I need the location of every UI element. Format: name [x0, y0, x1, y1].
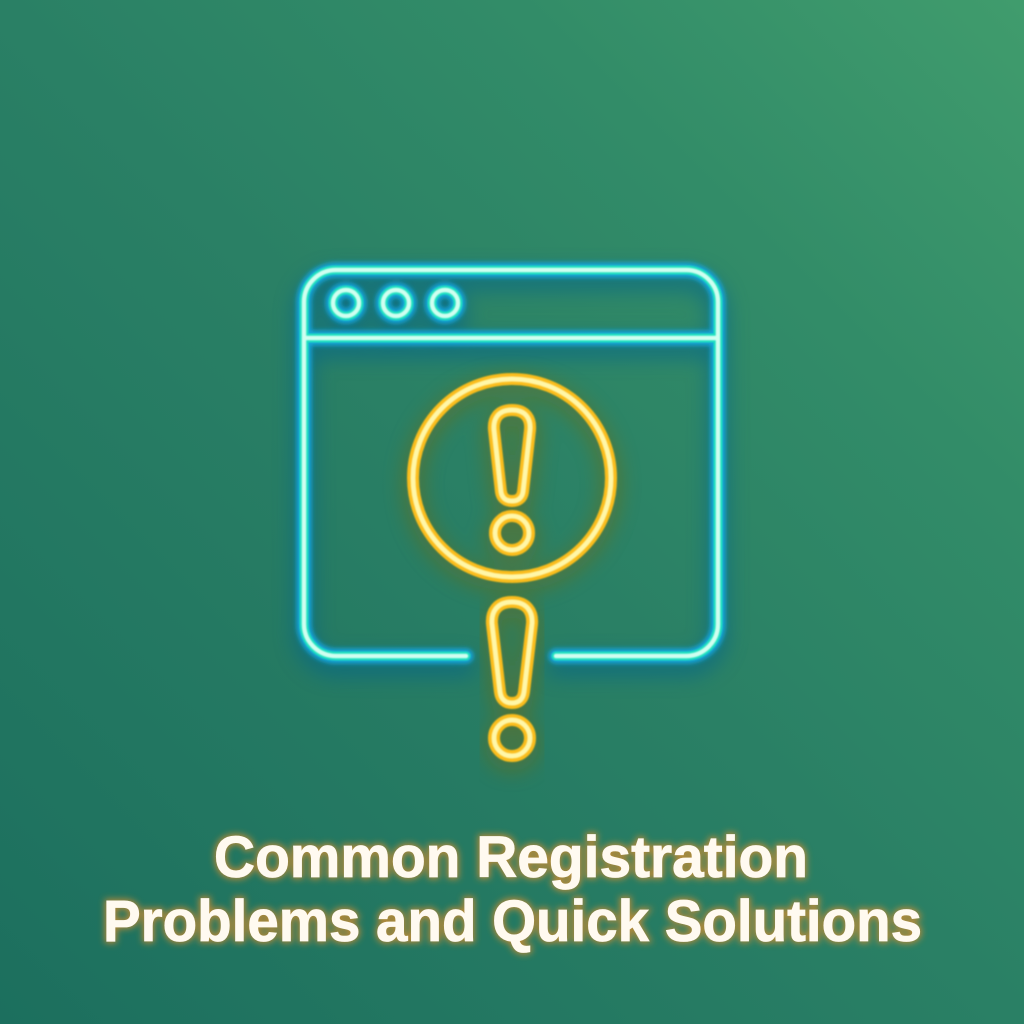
icon: warning circle with exclamation mark — [413, 379, 611, 583]
icon: lower exclamation mark — [492, 602, 532, 762]
title: Common Registration — [214, 825, 808, 890]
title: Problems and Quick Solutions — [103, 889, 922, 954]
icon: browser window — [304, 270, 718, 666]
title — [103, 825, 922, 954]
title: Common Registration — [214, 825, 808, 890]
title: Problems and Quick Solutions — [103, 889, 922, 954]
